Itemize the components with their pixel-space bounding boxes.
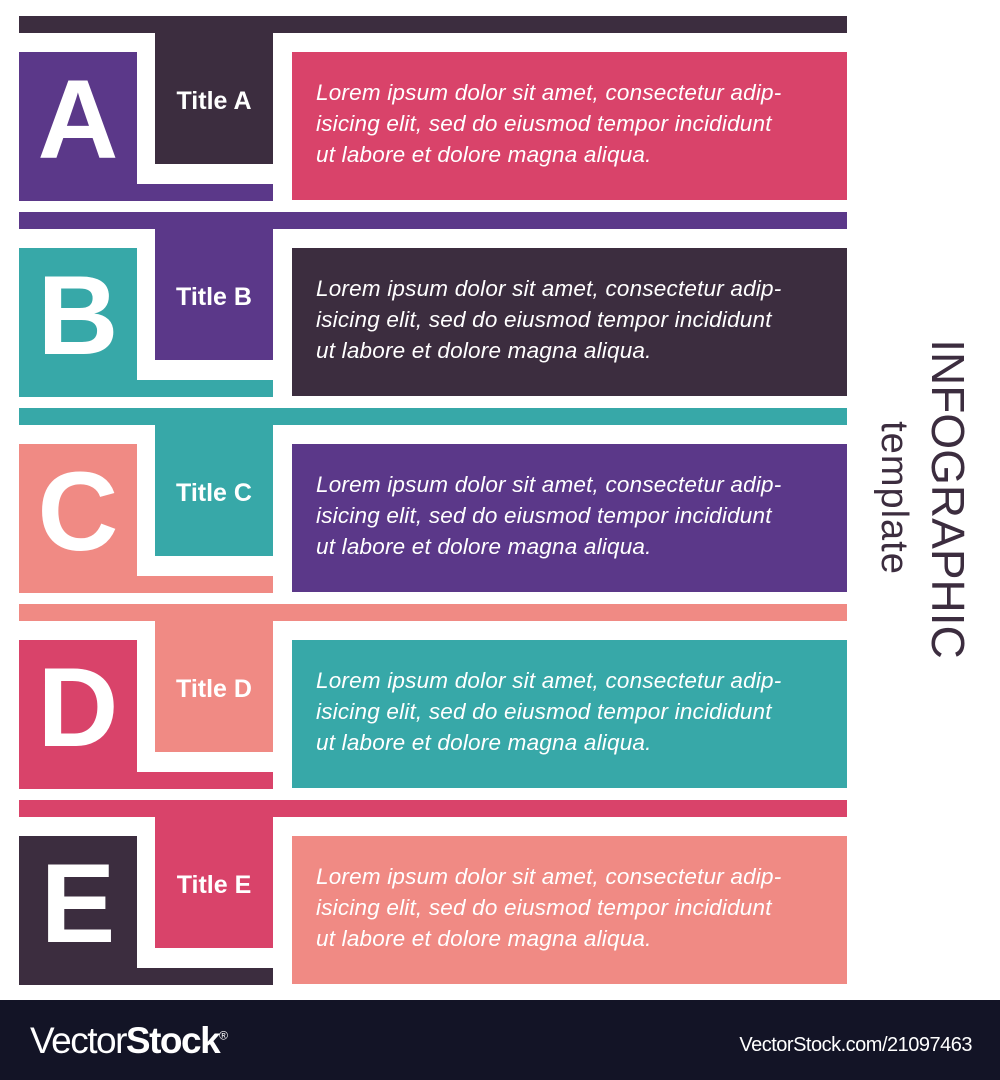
title C [155,425,273,556]
letter B: B [38,253,118,378]
letter E: E [41,841,115,966]
text B [292,248,847,396]
vertical subtitle template: template [873,421,915,575]
letter A: A [38,57,118,182]
text D: ut labore et dolore magna aliqua. [316,730,652,755]
text C: ut labore et dolore magna aliqua. [316,534,652,559]
footer url: VectorStock.com/21097463 [739,1034,972,1056]
row A [19,16,847,201]
text E [292,836,847,984]
vertical title INFOGRAPHIC: INFOGRAPHIC [922,339,974,659]
title A [155,33,273,164]
text D: Lorem ipsum dolor sit amet, consectetur adip- [316,668,781,693]
text D [292,640,847,788]
text E: isicing elit, sed do eiusmod tempor incididunt [316,895,772,920]
title D: Title D [176,675,252,703]
title B: Title B [176,283,252,311]
row E [19,800,847,985]
title B [155,229,273,360]
text E: ut labore et dolore magna aliqua. [316,926,652,951]
text C: Lorem ipsum dolor sit amet, consectetur adip- [316,472,781,497]
text A [292,52,847,200]
title A: Title A [176,87,252,115]
letter D: D [38,645,118,770]
text D: isicing elit, sed do eiusmod tempor incididunt [316,699,772,724]
row D [19,604,847,789]
text A: ut labore et dolore magna aliqua. [316,142,652,167]
text B: ut labore et dolore magna aliqua. [316,338,652,363]
footer [0,1000,1000,1080]
text A: Lorem ipsum dolor sit amet, consectetur adip- [316,80,781,105]
text C [292,444,847,592]
title E: Title E [177,871,251,899]
row C [19,408,847,593]
footer logo: VectorStock® [30,1020,227,1061]
letter A [19,52,137,184]
text B: isicing elit, sed do eiusmod tempor incididunt [316,307,772,332]
text E: Lorem ipsum dolor sit amet, consectetur adip- [316,864,781,889]
title D [155,621,273,752]
title C: Title C [176,479,252,507]
text B: Lorem ipsum dolor sit amet, consectetur adip- [316,276,781,301]
letter C [19,444,137,576]
text C: isicing elit, sed do eiusmod tempor incididunt [316,503,772,528]
letter C: C [38,449,118,574]
letter B [19,248,137,380]
row B [19,212,847,397]
title E [155,817,273,948]
letter E [19,836,137,968]
text A: isicing elit, sed do eiusmod tempor incididunt [316,111,772,136]
letter D [19,640,137,772]
